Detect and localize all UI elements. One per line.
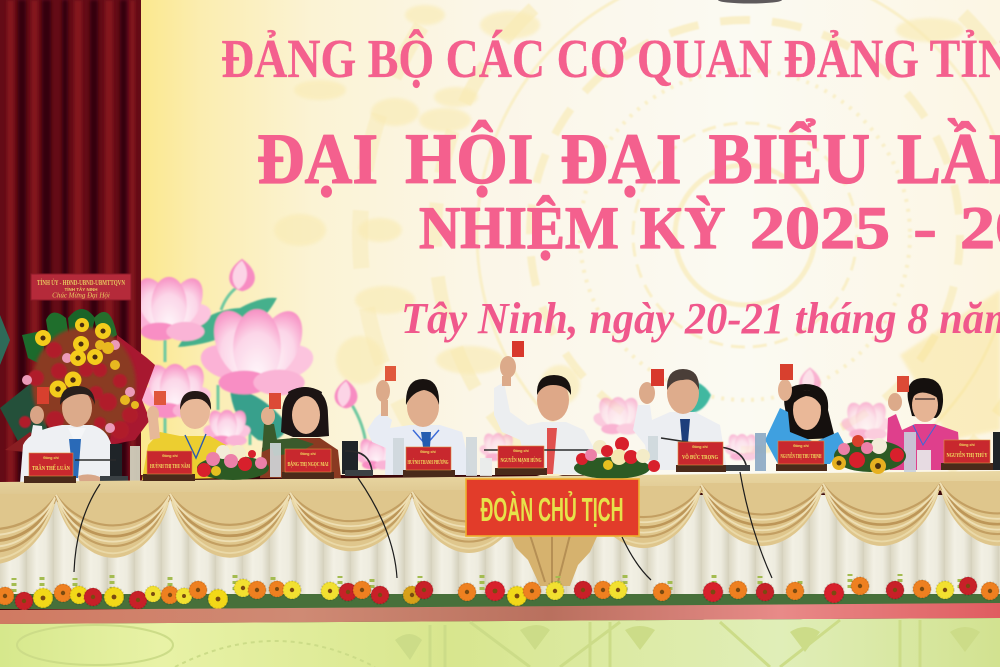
heading: term of office <box>419 195 1000 262</box>
plaque: Huỳnh Thanh Phương: HUỲNH THANH PHƯƠNG <box>408 458 449 466</box>
plaque: Nguyễn Thị Thu Thịnh <box>776 441 827 471</box>
decorative bird motifs <box>274 5 964 405</box>
sign: presidium: ĐOÀN CHỦ TỊCH <box>480 491 624 528</box>
table top with gold cloth <box>0 471 1000 500</box>
gold swag drapery <box>0 481 1000 586</box>
plaque: Nguyễn Mạnh Hùng <box>495 446 547 475</box>
background: red stage curtain <box>0 0 142 486</box>
person 5: man with red tie raising arm high <box>494 341 595 474</box>
flower border along stage front <box>0 574 1000 610</box>
plaque: Võ Đức Trọng: Đồng chí <box>692 445 709 449</box>
table items: water bottles and microphones <box>75 432 1000 482</box>
bouquet left <box>197 445 269 480</box>
plaque: Nguyễn Thị Thủy <box>941 440 993 470</box>
plaque: Nguyễn Thị Thu Thịnh: Đồng chí <box>793 444 810 448</box>
white pleated table skirt <box>0 495 1000 595</box>
heading: term of office: NHIỆM KỲ <box>419 195 725 261</box>
sign: presidium <box>466 479 639 536</box>
name plaques <box>24 440 993 483</box>
microphone cables <box>74 472 772 580</box>
salmon ribbon along stage edge <box>0 603 1000 624</box>
plaque: Nguyễn Mạnh Hùng: Đồng chí <box>513 449 530 453</box>
banner: congratulation ribbon on flower stand <box>31 274 131 300</box>
person 1: delegate raising card <box>20 386 112 483</box>
table bouquets <box>197 435 906 480</box>
person 3: woman with shoulder-length hair <box>260 387 341 478</box>
plaque: Huỳnh Thị Thu Năm: Đồng chí <box>162 454 179 458</box>
LED backdrop screen <box>141 0 1000 620</box>
banner: congratulation ribbon on flower stand: TỈNH ỦY - HĐND-UBND-UBMTTQVN <box>37 277 125 287</box>
plaque: Huỳnh Thị Thu Năm: HUỲNH THỊ THU NĂM <box>150 462 190 470</box>
plaque: Võ Đức Trọng: VÕ ĐỨC TRỌNG <box>682 453 718 461</box>
person 8: woman in magenta with glasses <box>887 376 961 470</box>
plaque: Trần Thế Luân: Đồng chí <box>43 456 60 460</box>
plaque: Huỳnh Thị Thu Năm <box>143 451 195 481</box>
plaque: Nguyễn Mạnh Hùng: NGUYỄN MẠNH HÙNG <box>500 456 542 464</box>
person 2: woman in yellow ao dai <box>142 391 226 480</box>
banner: congratulation ribbon on flower stand: TỈNH TÂY NINH <box>65 286 97 292</box>
plaque: Trần Thế Luân <box>24 453 76 483</box>
plaque: Huỳnh Thanh Phương <box>403 447 455 477</box>
golden drum emblem pattern <box>360 0 1000 620</box>
person 7: woman in blue ao dai <box>765 364 845 464</box>
flower stand beside the stage <box>0 309 155 455</box>
bouquet centre <box>574 437 660 479</box>
plaque: Võ Đức Trọng <box>676 442 726 472</box>
green stage front panel with drum pattern <box>0 618 1000 667</box>
bouquet right <box>832 435 906 474</box>
banner: congratulation ribbon on flower stand: Chúc Mừng Đại Hội <box>52 292 110 300</box>
plaque: Trần Thế Luân: TRẦN THẾ LUÂN <box>32 464 71 472</box>
plaque: Nguyễn Thị Thu Thịnh: NGUYỄN THỊ THU THỊNH <box>780 452 822 460</box>
plaque: Huỳnh Thanh Phương: Đồng chí <box>420 450 437 454</box>
plaque: Nguyễn Thị Thủy: Đồng chí <box>959 443 976 447</box>
person 4: man in white shirt with blue tie <box>367 366 472 475</box>
plaque: Đặng Thị Ngọc Mai: Đồng chí <box>300 452 317 456</box>
plaque: Đặng Thị Ngọc Mai <box>282 449 334 479</box>
person 6: senior man with blue tie <box>633 369 727 470</box>
lotus illustration on backdrop <box>124 259 892 470</box>
plaque: Đặng Thị Ngọc Mai: ĐẶNG THỊ NGỌC MAI <box>288 460 329 468</box>
